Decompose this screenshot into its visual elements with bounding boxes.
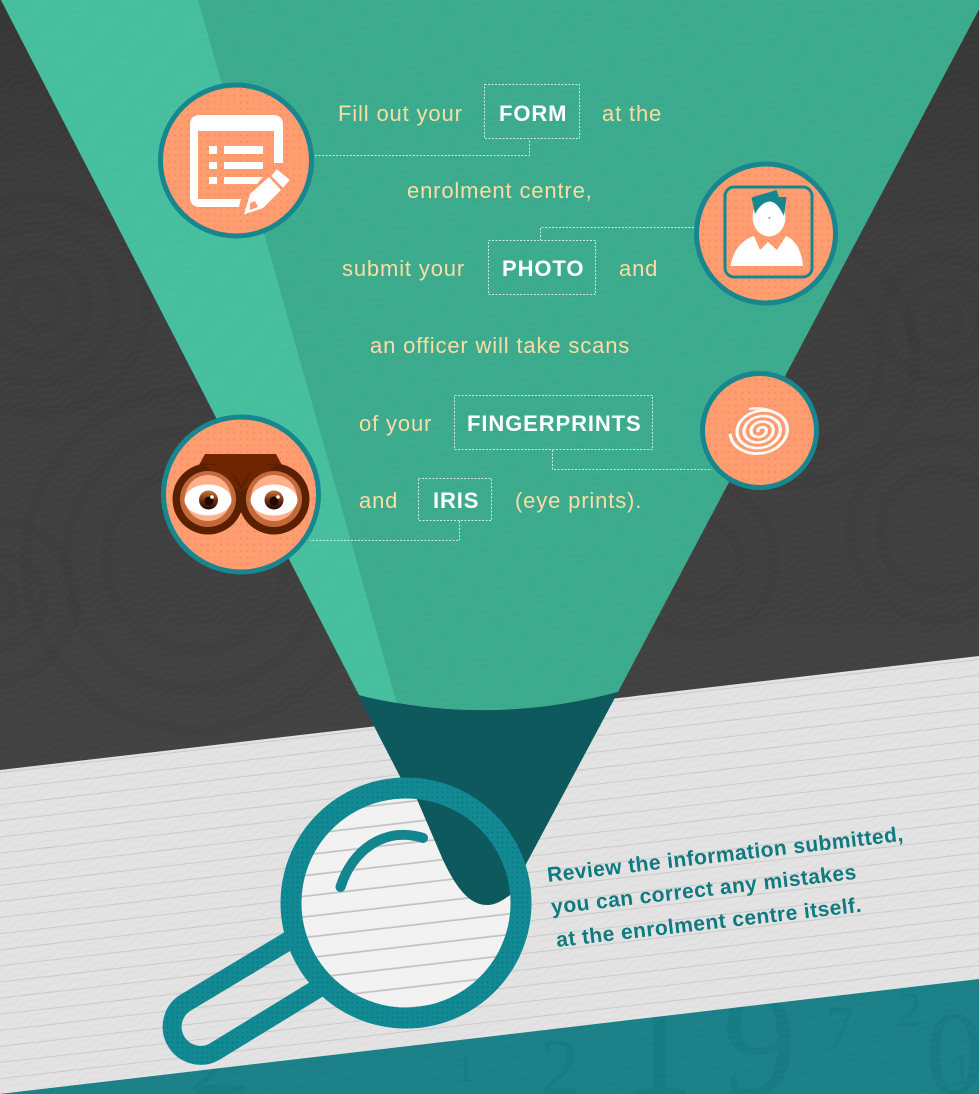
- line 1: Fill out your: [338, 101, 463, 126]
- left eye: [180, 471, 236, 527]
- line 6: and: [359, 488, 398, 513]
- icon: eyes / iris: [164, 417, 318, 572]
- beam texture: [1, 0, 979, 710]
- binocular frame: [198, 454, 283, 490]
- bottom teal band with faint numerals: 7: [826, 994, 855, 1059]
- line 3: [342, 240, 658, 294]
- line 3: submit your: [342, 256, 465, 281]
- light beam: main cone: [1, 0, 979, 710]
- paper sheet: [0, 656, 979, 1094]
- bottom teal band with faint numerals: [0, 979, 979, 1094]
- dark background with fingerprint swirls: [0, 0, 979, 780]
- beam tip seen through the lens: [416, 799, 510, 905]
- review text: [546, 823, 905, 952]
- line 5: FINGERPRINTS: [467, 411, 642, 436]
- icon: fingerprint: [702, 374, 816, 488]
- lens: [301, 798, 511, 1008]
- line 6: [359, 478, 642, 520]
- review text: you can correct any mistakes: [550, 861, 858, 919]
- dashed connectors: [310, 139, 712, 540]
- magnifying glass: [172, 788, 540, 1055]
- bottom teal band with faint numerals: 2: [897, 981, 922, 1037]
- line 5: [359, 396, 652, 450]
- line 1: at the: [602, 101, 662, 126]
- icon: photo: [696, 164, 836, 303]
- bottom teal band with faint numerals: 1: [455, 1046, 475, 1091]
- review text: at the enrolment centre itself.: [555, 894, 863, 952]
- line 6: (eye prints).: [515, 488, 642, 513]
- line 3: PHOTO: [502, 256, 584, 281]
- line 3: and: [619, 256, 658, 281]
- line 1: FORM: [499, 101, 567, 126]
- right eye: [246, 471, 302, 527]
- handle: [172, 934, 330, 1055]
- line 6: IRIS: [433, 488, 479, 513]
- line 2: enrolment centre,: [407, 178, 593, 203]
- line 4: an officer will take scans: [370, 333, 630, 358]
- bottom teal band with faint numerals: 1: [950, 1043, 973, 1094]
- lens highlight: [340, 835, 423, 887]
- dark teal beam tip: [358, 692, 618, 905]
- light beam: lighter left stripe: [1, 0, 397, 704]
- line 5: of your: [359, 411, 432, 436]
- icon: form: [160, 85, 312, 236]
- instructions text: [338, 84, 662, 520]
- review text: Review the information submitted,: [546, 823, 905, 887]
- ring: [291, 788, 521, 1018]
- line 1: [338, 84, 662, 138]
